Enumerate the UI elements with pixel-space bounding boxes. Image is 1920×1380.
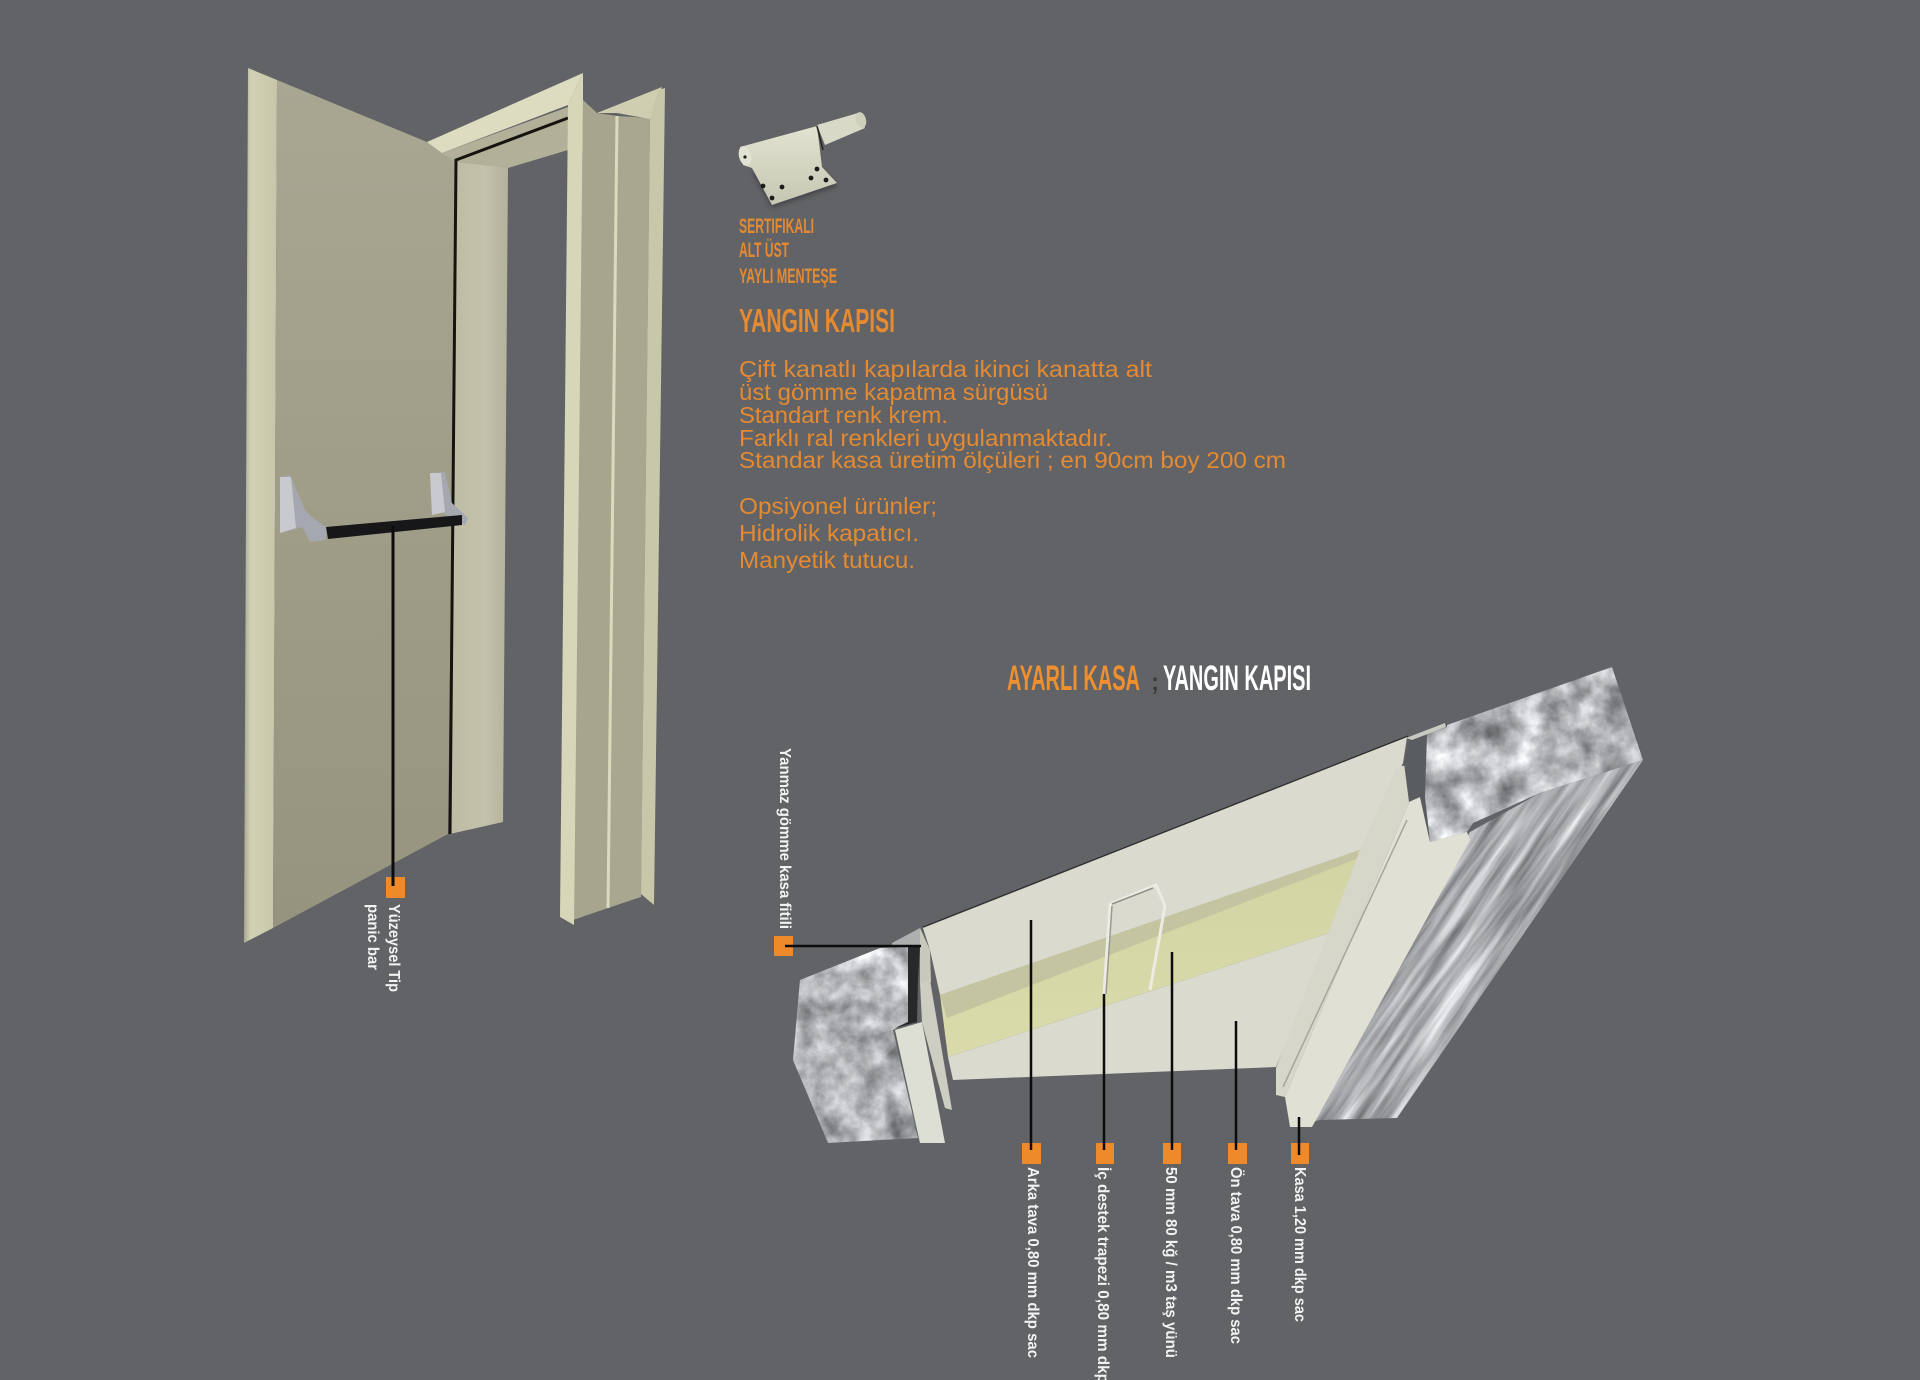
label: panic bar xyxy=(364,904,402,992)
callout labels: Ön tava 0,80 mm dkp sac xyxy=(1227,1167,1246,1344)
hinge caption xyxy=(739,215,837,288)
heading: Ayarlı Kasa: AYARLI KASA xyxy=(1007,659,1140,698)
left gasket xyxy=(895,945,920,1028)
heading: Ayarlı Kasa: ; xyxy=(1151,669,1159,696)
callout labels xyxy=(776,748,1308,1380)
description text: Standart renk krem. xyxy=(739,402,948,428)
right jamb outer xyxy=(1285,797,1470,1127)
description text: Farklı ral renkleri uygulanmaktadır. xyxy=(739,425,1112,451)
left jamb outer xyxy=(895,1022,945,1143)
panic bar xyxy=(280,472,468,542)
back tray top edge xyxy=(923,736,1408,927)
frame head underside xyxy=(442,107,568,168)
rear frame inner face xyxy=(608,116,650,908)
inner jamb xyxy=(450,160,508,834)
optional products text: Manyetik tutucu. xyxy=(739,547,915,573)
orange markers xyxy=(774,936,1309,1164)
callout labels: 50 mm 80 kğ / m3 taş yünü xyxy=(1162,1167,1179,1358)
door leaf panel xyxy=(273,80,456,928)
frame cross-section diagram xyxy=(774,667,1643,1380)
description text: üst gömme kapatma sürgüsü xyxy=(739,379,1048,405)
rear frame highlight xyxy=(608,116,617,908)
hinge caption: YAYLI MENTEŞE xyxy=(739,265,837,288)
hinge caption: SERTIFIKALI xyxy=(739,215,814,238)
callout labels: Arka tava 0,80 mm dkp sac xyxy=(1024,1167,1041,1358)
hinge caption: ALT ÜST xyxy=(739,239,789,262)
frame head front xyxy=(427,73,583,153)
icon: hinge xyxy=(737,111,868,208)
right wall top face xyxy=(1423,667,1643,842)
door leaf edge strip xyxy=(244,68,277,943)
heading: Ayarlı Kasa: YANGIN KAPISI xyxy=(1163,659,1311,698)
optional products text: Hidrolik kapatıcı. xyxy=(739,520,919,546)
description text: Standar kasa üretim ölçüleri ; en 90cm boy 200 cm xyxy=(739,447,1286,473)
left wall top face xyxy=(793,947,908,1060)
rock wool core xyxy=(940,850,1360,1057)
left housing xyxy=(280,475,327,542)
door illustration xyxy=(244,68,665,992)
right jamb groove xyxy=(1283,820,1407,1087)
rock wool shaded band xyxy=(940,851,1359,1018)
optional products text xyxy=(739,493,937,573)
description text: Çift kanatlı kapılarda ikinci kanatta alt xyxy=(739,356,1153,382)
callout labels: Kasa 1,20 mm dkp sac xyxy=(1291,1167,1308,1322)
left metal profile xyxy=(892,928,921,945)
right wall side face xyxy=(1315,760,1643,1122)
orange marker: panic bar xyxy=(386,877,405,898)
callout labels: Yanmaz gömme kasa fitili xyxy=(776,748,793,929)
leader lines xyxy=(785,920,1299,1155)
right metal profile xyxy=(1404,722,1447,842)
label: panic bar: panic bar xyxy=(364,904,381,970)
front tray xyxy=(948,932,1332,1080)
heading: Yangın Kapısı: YANGIN KAPISI xyxy=(739,302,895,339)
label: panic bar: Yüzeysel Tip xyxy=(385,904,402,992)
frame post front xyxy=(560,73,583,925)
outer frame side xyxy=(573,100,617,920)
black bar xyxy=(326,515,462,539)
description text xyxy=(739,356,1286,473)
rear frame strip xyxy=(641,88,665,905)
optional products text: Opsiyonel ürünler; xyxy=(739,493,937,519)
rear frame top cap xyxy=(597,87,662,119)
left jamb inner xyxy=(920,980,952,1110)
gasket lines xyxy=(450,118,568,834)
right jamb inner xyxy=(1276,765,1410,1097)
right housing xyxy=(430,472,468,525)
leader line: panic bar xyxy=(392,526,394,886)
left wall side face xyxy=(793,1030,918,1143)
left post xyxy=(920,928,931,984)
trapezoid support xyxy=(1104,885,1165,994)
back tray xyxy=(923,737,1407,995)
